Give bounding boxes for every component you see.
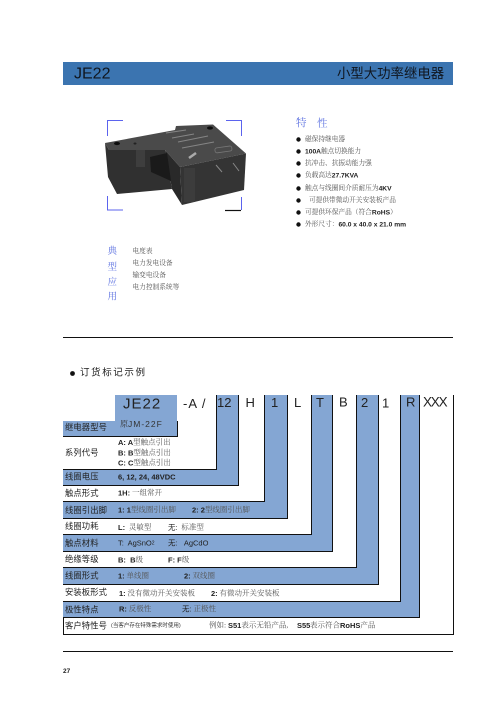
ordering code diagram [63,394,454,634]
ordering example heading: 订货标记示例 [80,366,147,378]
code letters: JE22 [123,396,161,412]
row labels and options: 原JM-22F [120,419,163,429]
code letters: 2 [361,395,368,410]
header band [63,62,453,85]
row labels and options: 继电器型号 [65,422,107,432]
applications list: 电力控制系统等 [132,282,180,291]
features heading: 特 性 [296,116,328,129]
product subtitle: 小型大功率继电器 [337,65,445,81]
features list [296,134,406,228]
code letters: -A / [183,396,207,411]
row labels and options [65,419,376,630]
row labels and options: 触点形式 [65,488,99,498]
row labels and options: S55 [297,620,310,630]
model title: JE22 [74,66,111,82]
row labels and options: 系列代号 [65,448,99,458]
code letters: XXX [423,394,448,410]
applications list [132,246,180,291]
features list: 可提供环保产品（符合RoHS） [305,207,397,216]
row labels and options: (当客户存在特殊需求时使用) [111,621,181,629]
image: relay photo with corner brackets [105,120,246,210]
row labels and options: 2: 2型线圈引出脚 [192,504,250,514]
applications list: 电度表 [132,246,153,255]
row labels and options: A: A型触点引出 [118,436,171,446]
row labels and options: 线圈功耗 [65,521,99,531]
features list: 可提供带微动开关安装板产品 [309,195,396,204]
row labels and options: 1H: 一组常开 [118,487,162,497]
typical applications heading: 型 [108,261,118,273]
applications list: 输变电设备 [132,270,166,279]
features list: 磁保持继电器 [305,134,345,143]
row labels and options: 1: 1型线圈引出脚 [118,504,176,514]
row labels and options: C: C型触点引出 [118,457,171,467]
row labels and options: 1: 单线圈 [118,570,150,580]
features list: 负载高达27.7KVA [305,170,359,179]
row labels and options: 例如: S51表示无铅产品, [209,620,288,630]
row labels and options: 绝缘等级 [65,554,99,564]
row labels and options: F: F级 [168,555,190,564]
code letters: 1 [382,396,389,410]
row labels and options: R: 反极性 [119,603,152,613]
code letters: 12 [217,395,231,410]
code letters: L [294,395,301,410]
code letters: T [316,395,324,410]
row labels and options: 安装板形式 [65,587,108,597]
black outlines [63,395,454,634]
code letters [123,394,448,412]
row labels and options: 线圈电压 [65,472,99,482]
row labels and options: B: B级 [118,555,144,564]
features list: 抗冲击、抗振动能力强 [305,158,372,167]
row labels and options: 2: 有微动开关安装板 [211,588,280,598]
code letters: H [246,395,255,410]
page number: 27 [63,668,71,675]
row labels and options: 2: 双线圈 [184,570,216,580]
code letters: B [339,394,348,410]
row labels and options: 无: 正极性 [182,603,216,613]
code letters: R [406,394,415,410]
row labels and options: 客户特性号 [65,620,107,630]
row labels and options: 极性特点 [65,604,99,614]
row labels and options: 表示符合RoHS产品 [310,620,376,630]
row labels and options: 1: 没有微动开关安装板 [119,588,196,598]
typical applications heading: 应 [108,276,118,288]
features list: 外形尺寸：60.0 x 40.0 x 21.0 mm [305,219,406,228]
row labels and options: L: 灵敏型 [118,522,152,532]
row labels and options: 线圈形式 [65,570,99,580]
blue rows and columns [63,395,419,617]
features list: 触点与线圈间介质耐压为4KV [305,183,392,192]
row labels and options: B: B型触点引出 [118,447,171,457]
row labels and options: 触点材料 [65,538,99,548]
code letters: 1 [271,395,278,410]
features list: 100A触点切换能力 [305,146,361,155]
typical applications heading [108,245,118,302]
row labels and options: 无: 标准型 [168,522,204,532]
typical applications heading: 用 [108,292,117,302]
row labels and options: 线圈引出脚 [65,505,107,515]
row labels and options: 6, 12, 24, 48VDC [118,472,176,481]
row labels and options: T: AgSnO [118,538,152,547]
typical applications heading: 典 [108,245,118,257]
applications list: 电力发电设备 [132,258,173,267]
row labels and options: 2 [152,540,155,546]
row labels and options: 无: AgCdO [168,538,209,547]
